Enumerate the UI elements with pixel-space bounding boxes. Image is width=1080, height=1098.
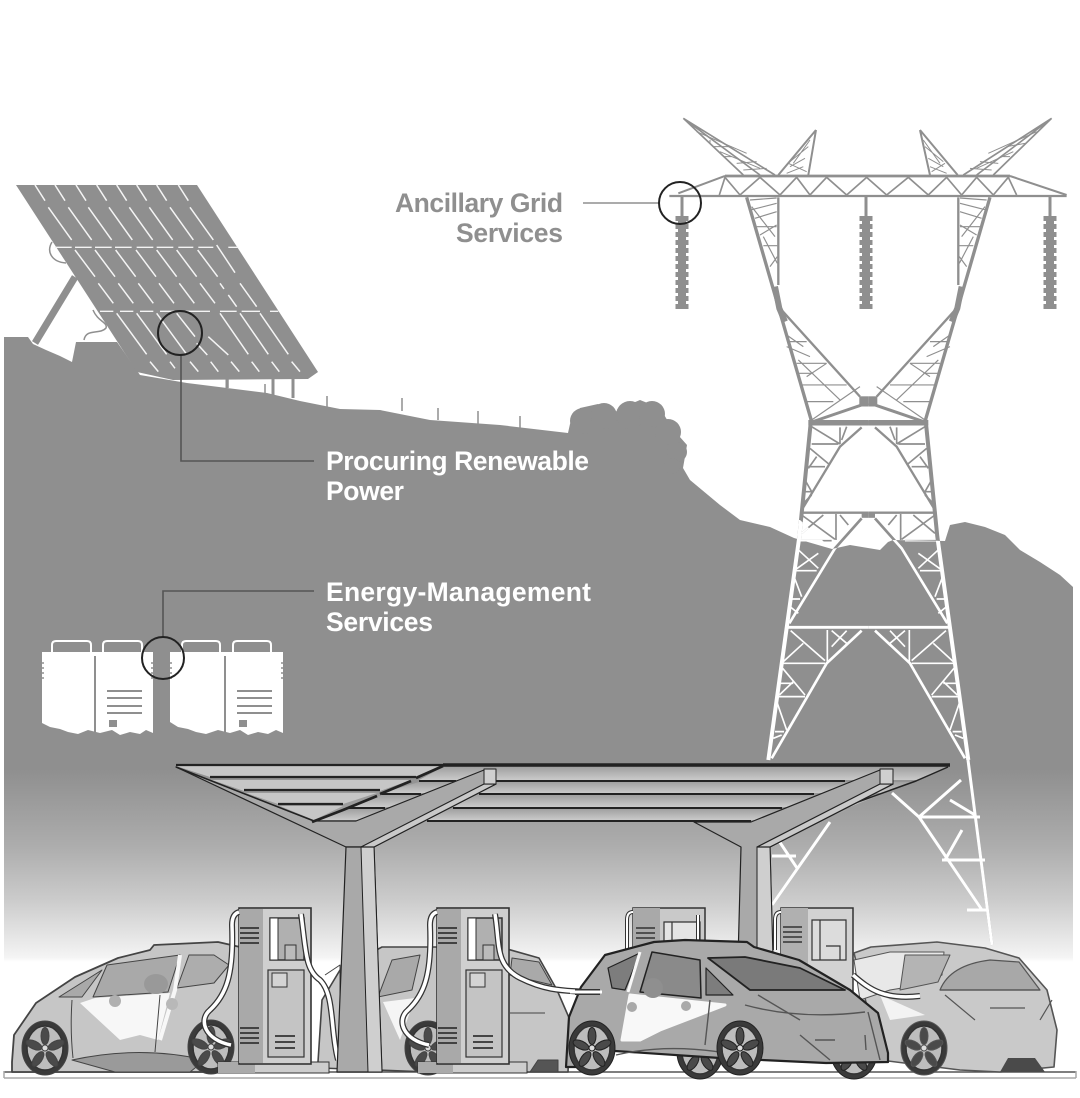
callout: ancillary grid services: [395, 182, 701, 248]
charger 1: [204, 908, 338, 1073]
car: back left: [318, 947, 570, 1075]
insulators: [682, 196, 1050, 312]
power transmission tower: [669, 118, 1067, 945]
carport canopy: [176, 765, 950, 960]
charger 3: [627, 908, 705, 968]
car: rear right: [854, 942, 1057, 1075]
callout: energy-management services: Energy-Management: [326, 577, 591, 607]
callout: procuring renewable power: Power: [326, 476, 404, 506]
callout: energy-management services: [142, 577, 591, 679]
hillside silhouette: [4, 337, 1073, 962]
car: foreground: [566, 940, 888, 1079]
charger 4: [775, 908, 853, 1008]
callout: ancillary grid services: Ancillary Grid: [395, 188, 563, 218]
tree on the ridge: [570, 401, 687, 474]
callout: procuring renewable power: Procuring Renewable: [326, 446, 589, 476]
charger 2: [402, 908, 605, 1073]
left column post: [337, 769, 496, 1072]
ground line: [4, 1071, 1076, 1078]
charging cable: right car: [853, 975, 920, 997]
solar panel array: [16, 185, 318, 398]
right Y-column: [694, 769, 893, 960]
callout: procuring renewable power: [158, 311, 589, 506]
callout: energy-management services: Services: [326, 607, 433, 637]
left canopy arm and panel: [176, 767, 496, 847]
callout: ancillary grid services: Services: [456, 218, 563, 248]
battery storage units: [40, 641, 285, 735]
car: front left: [12, 942, 262, 1075]
